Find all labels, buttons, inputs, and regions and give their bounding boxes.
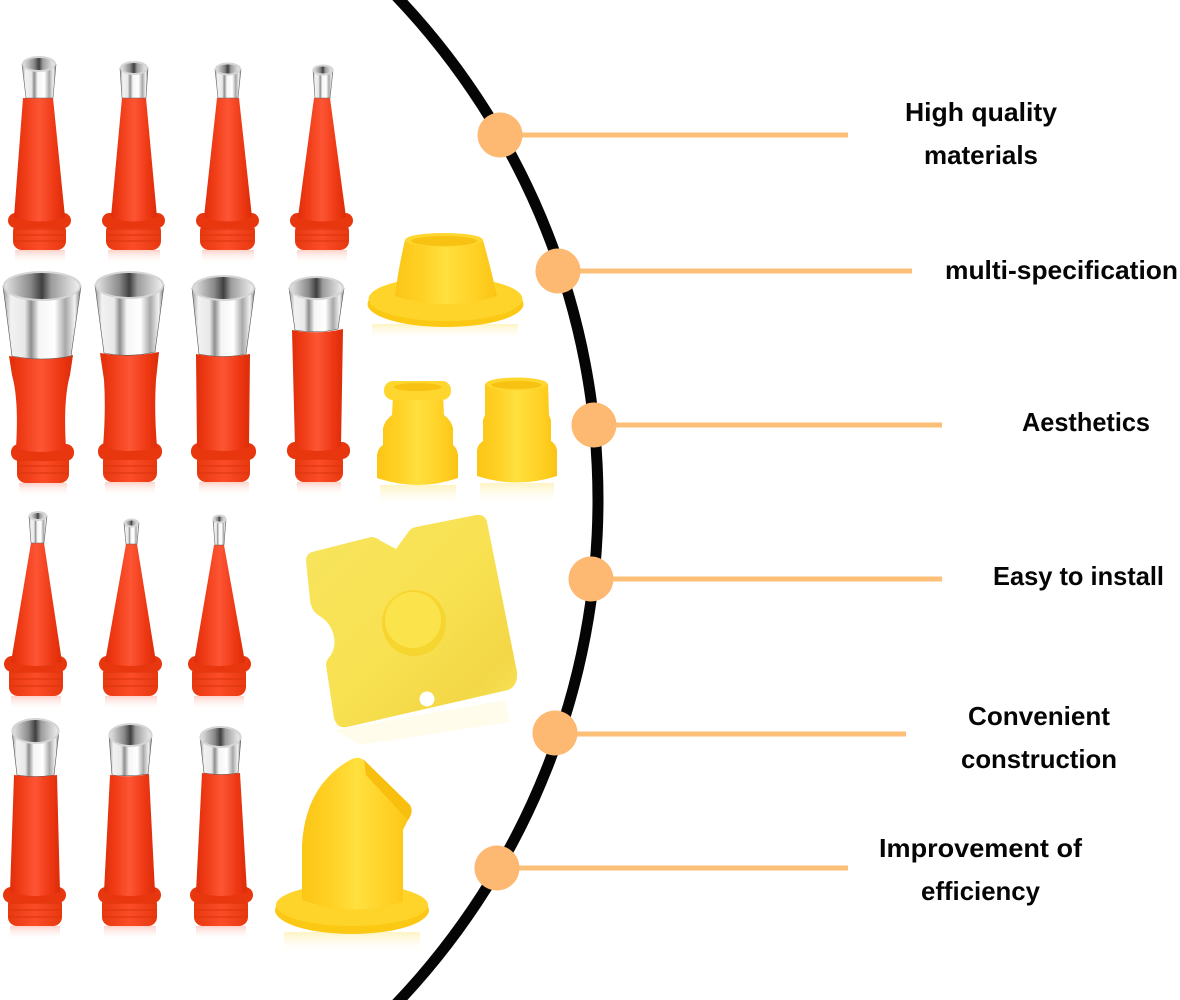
marker dot (536, 248, 580, 294)
label: efficiency (921, 876, 1041, 906)
panel: nozzles row 3 (4, 512, 251, 710)
nozzle 5 (3, 272, 81, 497)
scraper button (382, 590, 446, 656)
nozzle 14 (190, 727, 253, 940)
nozzle 9 (4, 512, 67, 710)
nozzle 11 (188, 516, 251, 710)
marker dot (474, 846, 520, 890)
label: Aesthetics (1022, 407, 1150, 437)
nozzle 8 (287, 277, 350, 496)
label: construction (961, 744, 1117, 774)
label (961, 701, 1117, 774)
panel: nozzles row 4 (3, 719, 253, 940)
black arc (392, 0, 603, 1000)
label: Improvement of (879, 833, 1082, 863)
marker dot (572, 402, 616, 448)
nozzle 13 (98, 724, 161, 940)
marker dot (532, 710, 578, 756)
label (905, 97, 1058, 170)
marker dot (568, 556, 614, 602)
panel: nozzles row 2 (3, 272, 350, 497)
yellow connector 1 (377, 381, 458, 507)
nozzle 4 (290, 66, 353, 264)
panel: nozzles row 1 (8, 57, 353, 264)
feature 6: improvement of efficiency (474, 833, 1082, 906)
label: High quality (905, 97, 1058, 127)
feature 1: high quality materials (478, 97, 1058, 170)
yellow connector 2 (477, 378, 557, 505)
yellow scraper card (306, 515, 517, 745)
marker dot (478, 112, 522, 158)
label: Convenient (968, 701, 1110, 731)
feature 3: aesthetics (572, 402, 1150, 448)
label: multi-specification (945, 255, 1178, 285)
label: materials (924, 140, 1038, 170)
scraper hole (420, 692, 434, 706)
feature 4: easy to install (568, 556, 1164, 602)
feature 5: convenient construction (532, 701, 1117, 774)
label (879, 833, 1082, 906)
nozzle 3 (196, 64, 259, 264)
yellow hat adapter (368, 233, 524, 340)
feature 2: multi-specification (536, 248, 1178, 294)
yellow elbow adapter (275, 758, 429, 954)
label: Easy to install (993, 561, 1164, 591)
nozzle 10 (99, 520, 162, 710)
nozzle 1 (8, 57, 71, 264)
nozzle 2 (102, 62, 165, 264)
nozzle 6 (95, 272, 164, 496)
nozzle 7 (191, 276, 256, 496)
nozzle 12 (3, 719, 66, 940)
